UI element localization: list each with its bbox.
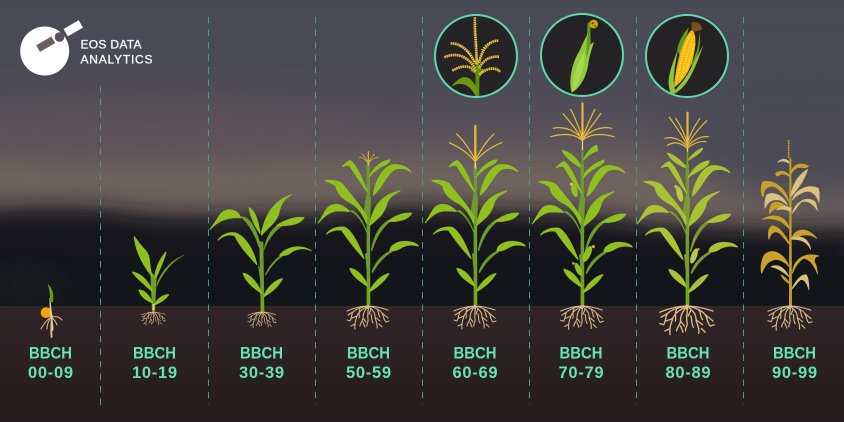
logo wordmark: ANALYTICS [80,52,152,66]
label: BBCH 00-09 [28,344,73,382]
label: BBCH 60-69: 60-69 [452,364,498,382]
background: dusk sky [0,0,844,306]
label: BBCH 60-69: BBCH [454,344,496,362]
plant: stage 60-69 tasseling [425,126,525,329]
label: BBCH 00-09: BBCH [29,344,72,362]
logo icon: satellite globe [20,20,83,76]
icon: ripe corn cob in circle [646,15,728,97]
plant: stage 80-89 ripening [637,113,737,335]
plant: stage 90-99 dried senescent [761,140,819,330]
label: BBCH 80-89 [666,344,710,382]
label: BBCH 90-99: BBCH [773,344,816,362]
small tassel [359,152,378,165]
plant: stage 10-19 young shoot [132,237,184,325]
label: BBCH 50-59: BBCH [347,344,390,362]
label: BBCH 00-09: 00-09 [28,364,73,382]
stage labels [28,344,817,382]
background: blurred sky glow [0,60,844,200]
label: BBCH 50-59: 50-59 [346,364,391,382]
label: BBCH 80-89: BBCH [666,344,710,362]
plant: stage 00-09 seedling [41,284,62,337]
stage divider dashed lines [100,17,744,405]
label: BBCH 10-19: BBCH [133,344,176,362]
tassel [449,126,502,168]
icon: seed [41,307,51,318]
label: BBCH 30-39: 30-39 [239,364,284,382]
soil band [0,306,844,422]
label: BBCH 70-79 [558,344,604,382]
label: BBCH 90-99 [772,344,817,382]
label: BBCH 10-19 [132,344,177,382]
logo wordmark: EOS DATA [80,37,142,51]
label: BBCH 30-39: BBCH [240,344,283,362]
label: BBCH 50-59 [346,344,391,382]
label: BBCH 70-79: BBCH [560,344,602,362]
corn ears on stalk [570,182,595,277]
label: BBCH 80-89: 80-89 [666,364,710,382]
label: BBCH 60-69 [452,344,498,382]
label: BBCH 90-99: 90-99 [772,364,817,382]
label: BBCH 70-79: 70-79 [558,364,604,382]
icon: green corn ear in circle [541,14,623,96]
tassel [665,113,708,152]
corn ears on stalk [674,185,700,265]
plant: stage 50-59 tassel emerging [318,152,418,329]
logo: EOS Data Analytics [20,20,153,76]
icon: corn tassel in circle [435,15,517,97]
plant: stage 30-39 leafy stalk [210,195,311,328]
label: BBCH 10-19: 10-19 [132,364,177,382]
plant: stage 70-79 silking [532,103,632,329]
logo wordmark [80,37,152,66]
background: dark tree line [0,205,844,320]
label: BBCH 30-39 [239,344,284,382]
big tassel [551,103,614,150]
